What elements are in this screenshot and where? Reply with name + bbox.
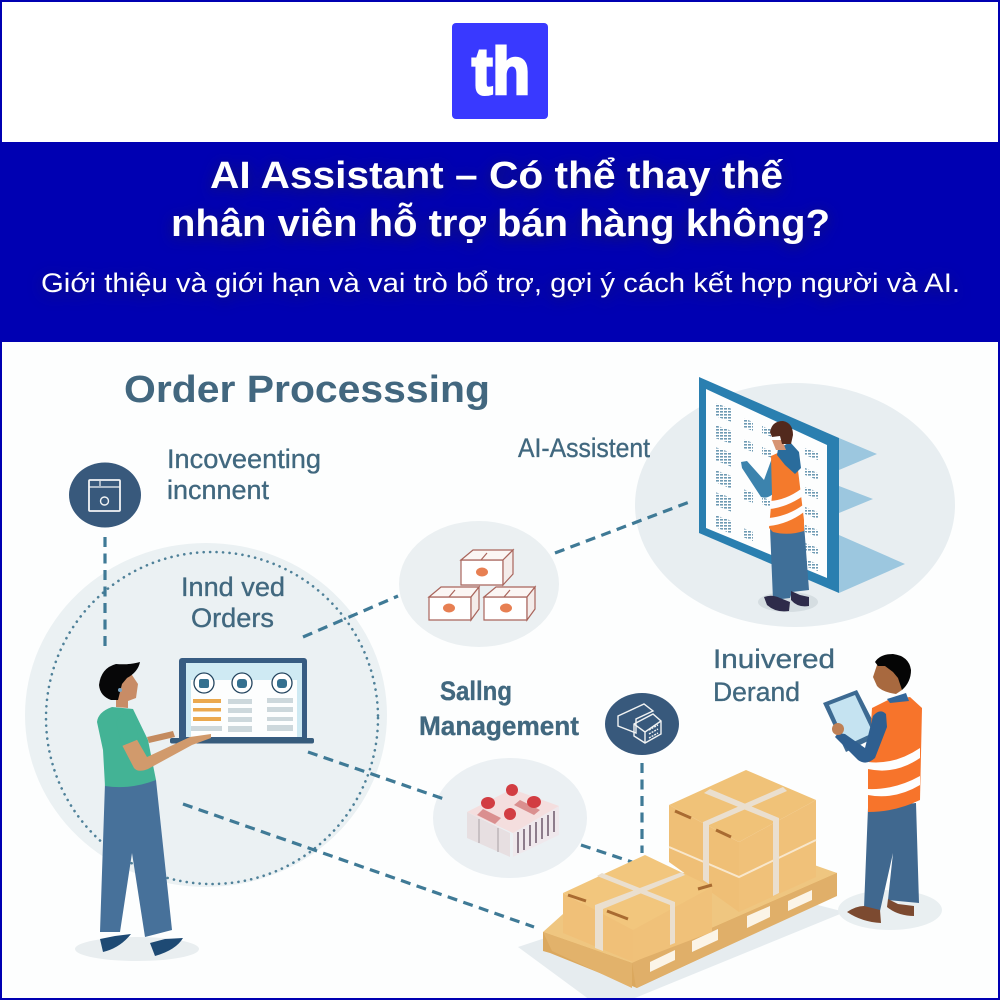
label: inventory: incnnent bbox=[167, 475, 269, 505]
sleeve bbox=[116, 714, 139, 746]
head bbox=[873, 654, 911, 694]
ellipse: boxes bbox=[399, 521, 559, 647]
vest bbox=[868, 697, 922, 812]
head bbox=[99, 662, 140, 708]
label: delivered demand bbox=[713, 644, 835, 707]
label: delivered demand: Inuivered bbox=[713, 644, 835, 674]
label: selling management: Management bbox=[419, 711, 579, 741]
app icons bbox=[194, 673, 292, 693]
label: selling management: Sallng bbox=[440, 676, 512, 706]
big box bbox=[669, 770, 816, 912]
collar bbox=[887, 693, 909, 703]
title: AI Assistant – Có thể thay thế bbox=[210, 155, 784, 197]
table data bbox=[715, 403, 818, 571]
arm bbox=[835, 711, 887, 763]
shoes bbox=[764, 591, 809, 611]
shoes bbox=[847, 899, 914, 923]
label: orders: Innd ved bbox=[181, 572, 285, 602]
label: delivered demand: Derand bbox=[713, 677, 800, 707]
ellipse: selling bbox=[433, 758, 587, 878]
illustration background bbox=[0, 342, 1000, 1000]
title bbox=[171, 155, 830, 245]
rows bbox=[193, 699, 221, 721]
title: nhân viên hỗ trợ bán hàng không? bbox=[171, 201, 830, 245]
icon: gift stock box bbox=[467, 784, 559, 857]
connector lines bbox=[105, 501, 692, 927]
head bbox=[770, 421, 793, 450]
legs bbox=[100, 780, 172, 937]
label: AI assistant: AI-Assistent bbox=[518, 433, 650, 463]
hand bbox=[832, 723, 844, 735]
hood bbox=[777, 442, 801, 474]
arm bbox=[741, 458, 786, 498]
logo: th bbox=[452, 23, 548, 119]
icon: packages bbox=[605, 693, 679, 755]
ellipse: AI assistant bbox=[635, 383, 955, 627]
pallet bbox=[543, 860, 837, 988]
shirt bbox=[97, 707, 156, 787]
vest bbox=[769, 451, 804, 534]
heading: order processing: Order Processsing bbox=[124, 369, 490, 411]
vest stripes bbox=[769, 489, 804, 526]
vest stripes bbox=[868, 748, 920, 796]
ground shadow: pallet bbox=[518, 880, 845, 1000]
front arm bbox=[122, 734, 211, 771]
pallet with boxes bbox=[543, 770, 837, 988]
board: data display bbox=[699, 377, 905, 593]
label: orders bbox=[181, 572, 285, 633]
logo: th: th bbox=[472, 34, 530, 108]
tablet bbox=[823, 690, 880, 752]
small box bbox=[563, 855, 712, 962]
large circle: inbound orders bbox=[25, 543, 387, 887]
label: inventory: Incoveenting bbox=[167, 444, 321, 474]
back hand arm bbox=[147, 731, 175, 743]
label: orders: Orders bbox=[191, 603, 274, 633]
icon: inventory bbox=[69, 462, 141, 528]
label: selling management bbox=[419, 676, 579, 741]
label: inventory bbox=[167, 444, 321, 505]
worker with tablet bbox=[823, 654, 942, 930]
legs bbox=[864, 803, 919, 911]
icon: three parcels bbox=[429, 550, 535, 620]
shoes bbox=[100, 934, 183, 956]
subtitle: Giới thiệu và giới hạn và vai trò bổ trợ, gợi ý cách kết hợp người và AI. bbox=[41, 268, 960, 298]
header band bbox=[0, 142, 1000, 342]
legs bbox=[770, 524, 809, 600]
person at laptop bbox=[75, 658, 314, 961]
worker at board bbox=[741, 421, 818, 612]
laptop bbox=[170, 658, 314, 744]
